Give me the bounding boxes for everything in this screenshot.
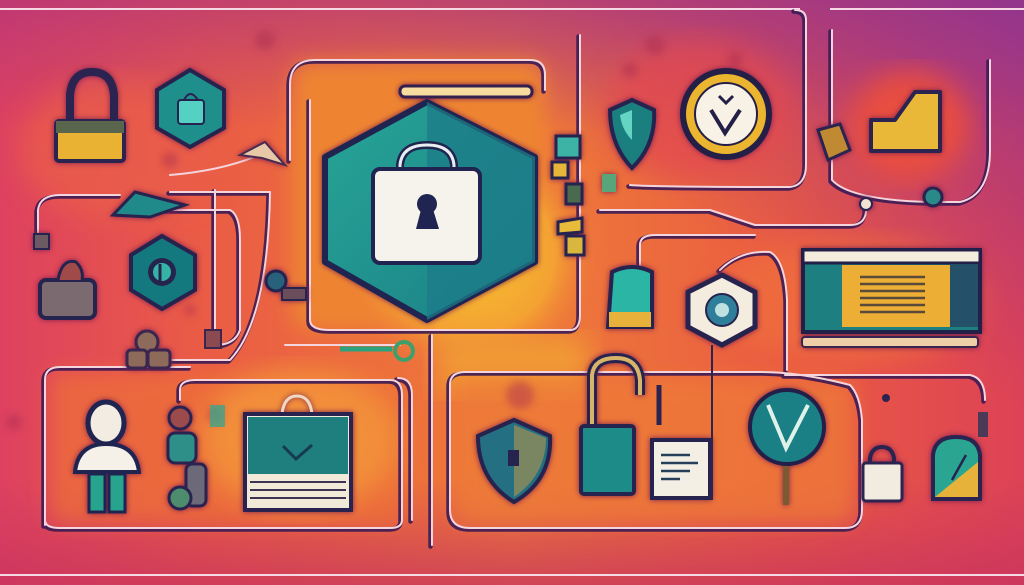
icon: checkmark magnifier	[750, 390, 824, 505]
icon: bag left	[40, 261, 95, 318]
icon: hexagon lens	[688, 275, 755, 345]
icon: round check badge	[680, 68, 772, 160]
icon: teal tag	[608, 267, 652, 327]
icon: hexagon badge left	[131, 236, 195, 309]
icon: hexagon lock top left	[157, 70, 224, 147]
icon: key	[340, 342, 413, 360]
icon: person	[75, 402, 139, 512]
hexagon shield	[325, 102, 535, 320]
icon: folder and node top right	[818, 92, 942, 210]
icon: connector left	[34, 192, 185, 249]
icon: monitor window	[802, 250, 980, 347]
icon: large padlock bottom	[581, 358, 640, 494]
padlock	[373, 145, 480, 263]
central shield with padlock	[325, 86, 535, 320]
icon: laptop envelope	[245, 396, 351, 510]
icon: small shield top	[610, 100, 654, 168]
icon: plug near centre	[240, 142, 306, 300]
icon: small hanging ornaments	[205, 330, 988, 500]
icon: small padlock right	[863, 447, 902, 501]
icon: shield bottom	[478, 420, 550, 502]
icon: padlock top left	[56, 72, 124, 161]
icon: node cluster	[168, 407, 206, 509]
icon: arched card	[933, 437, 980, 499]
icon: small connectors beside shield	[552, 136, 616, 255]
icon: document	[652, 440, 710, 498]
icon: stacked blocks	[127, 331, 170, 368]
hanging bar	[400, 86, 532, 97]
